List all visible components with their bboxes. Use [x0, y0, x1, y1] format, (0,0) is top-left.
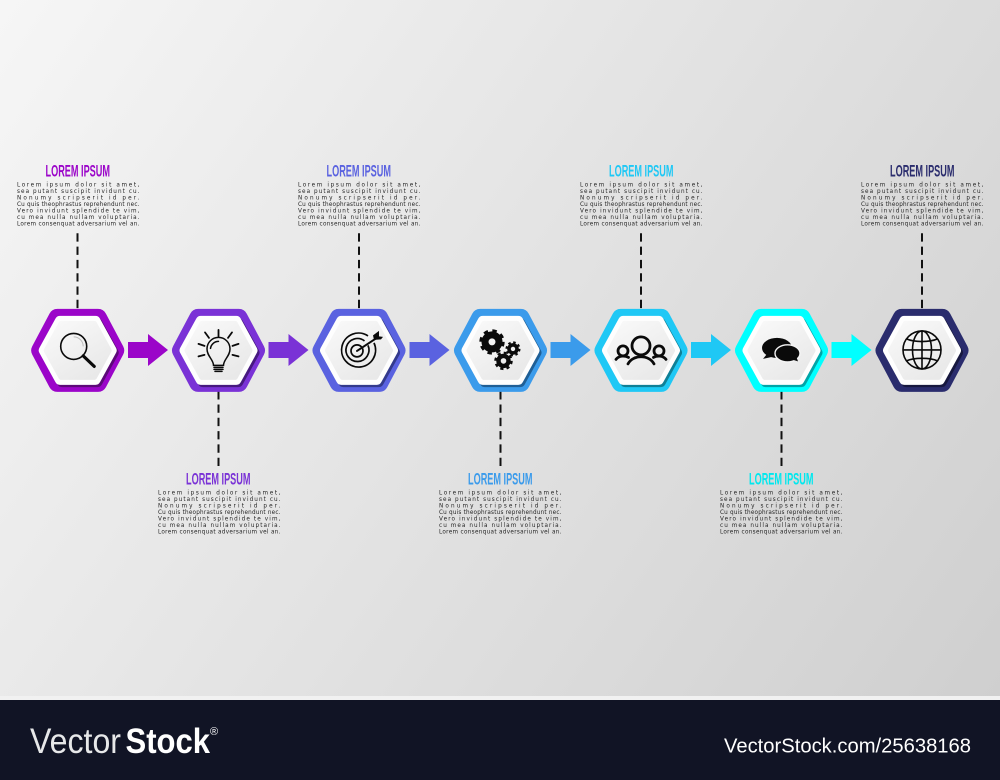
icon: globe	[903, 331, 941, 369]
text block 6: sea putant suscipit invidunt cu.	[720, 497, 843, 503]
text block 4: Vero invidunt splendide te vim,	[439, 517, 562, 523]
text block 4: Lorem ipsum dolor sit amet,	[439, 490, 562, 496]
step 6: chat	[720, 318, 843, 536]
text block 4: Nonumy scripserit id per.	[439, 503, 562, 509]
text block 1: Nonumy scripserit id per.	[17, 195, 140, 201]
text block 7: sea putant suscipit invidunt cu.	[861, 189, 984, 195]
text block 6	[720, 490, 843, 536]
text block 5: Vero invidunt splendide te vim,	[580, 209, 703, 215]
text block 5: Nonumy scripserit id per.	[580, 195, 703, 201]
hexagon 6	[744, 318, 819, 383]
heading 3: LOREM IPSUM	[326, 162, 391, 181]
heading 1: LOREM IPSUM	[46, 162, 110, 181]
text block 7: cu mea nulla nullam voluptaria.	[861, 215, 984, 221]
text block 7: Nonumy scripserit id per.	[861, 195, 984, 201]
text block 2: sea putant suscipit invidunt cu.	[158, 497, 281, 503]
heading 5: LOREM IPSUM	[609, 162, 674, 181]
text block 7: Lorem ipsum dolor sit amet,	[861, 182, 984, 188]
connector 4	[500, 391, 502, 466]
text block 6: Lorem ipsum dolor sit amet,	[720, 490, 843, 496]
step 1: search	[17, 162, 140, 383]
arrow 1	[128, 334, 168, 366]
text block 3: Lorem consenquat adversarium vel an.	[298, 222, 421, 228]
icon: gears	[481, 331, 520, 369]
text block 3: Nonumy scripserit id per.	[298, 195, 421, 201]
step 3: target	[298, 162, 421, 383]
text block 1: sea putant suscipit invidunt cu.	[17, 189, 140, 195]
text block 3: Lorem ipsum dolor sit amet,	[298, 182, 421, 188]
icon: magnifying glass	[61, 333, 94, 366]
text block 2: cu mea nulla nullam voluptaria.	[158, 523, 281, 529]
text block 1: Vero invidunt splendide te vim,	[17, 209, 140, 215]
hexagon 4	[463, 318, 538, 383]
connector 1	[76, 233, 78, 310]
text block 2: Vero invidunt splendide te vim,	[158, 517, 281, 523]
heading 2: LOREM IPSUM	[186, 470, 250, 489]
footer url: VectorStock.com/25638168	[724, 736, 971, 758]
text block 4: Cu quis theophrastus reprehendunt nec.	[439, 510, 562, 516]
footer logo: Stock	[126, 722, 210, 761]
text block 4: sea putant suscipit invidunt cu.	[439, 497, 562, 503]
text block 2: Cu quis theophrastus reprehendunt nec.	[158, 510, 281, 516]
text block 4: cu mea nulla nullam voluptaria.	[439, 523, 562, 529]
arrow 3	[410, 334, 450, 366]
footer logo: ®	[210, 726, 218, 738]
step 5: people	[580, 162, 703, 383]
footer logo: Vector	[30, 722, 121, 761]
text block 5: Cu quis theophrastus reprehendunt nec.	[580, 202, 703, 208]
text block 6: Cu quis theophrastus reprehendunt nec.	[720, 510, 843, 516]
text block 6: Lorem consenquat adversarium vel an.	[720, 530, 843, 536]
connector 7	[921, 233, 923, 310]
step 7: globe	[861, 162, 984, 383]
arrow 6	[832, 334, 872, 366]
text block 3	[298, 182, 421, 228]
text block 1: Lorem consenquat adversarium vel an.	[17, 222, 140, 228]
arrow 4	[550, 334, 590, 366]
text block 6: cu mea nulla nullam voluptaria.	[720, 523, 843, 529]
connector 6	[780, 391, 782, 466]
text block 7: Cu quis theophrastus reprehendunt nec.	[861, 202, 984, 208]
text block 1	[17, 182, 140, 228]
text block 6: Vero invidunt splendide te vim,	[720, 517, 843, 523]
hexagon 3	[322, 318, 396, 383]
connector 3	[358, 233, 360, 310]
connector 5	[640, 233, 642, 310]
text block 1: Lorem ipsum dolor sit amet,	[17, 182, 140, 188]
text block 5: cu mea nulla nullam voluptaria.	[580, 215, 703, 221]
text block 7: Vero invidunt splendide te vim,	[861, 209, 984, 215]
hexagon 2	[181, 318, 256, 383]
icon: people group	[616, 337, 666, 364]
step 2: idea	[158, 318, 281, 536]
text block 5: Lorem consenquat adversarium vel an.	[580, 222, 703, 228]
text block 5: Lorem ipsum dolor sit amet,	[580, 182, 703, 188]
hexagon 1	[40, 318, 115, 383]
icon: target with arrow	[342, 331, 383, 367]
text block 2: Nonumy scripserit id per.	[158, 503, 281, 509]
text block 2: Lorem consenquat adversarium vel an.	[158, 530, 281, 536]
text block 3: Cu quis theophrastus reprehendunt nec.	[298, 202, 421, 208]
text block 1: cu mea nulla nullam voluptaria.	[17, 215, 140, 221]
text block 7	[861, 182, 984, 228]
footer bar	[0, 700, 1000, 780]
heading 6: LOREM IPSUM	[749, 470, 814, 489]
text block 3: cu mea nulla nullam voluptaria.	[298, 215, 421, 221]
text block 5	[580, 182, 703, 228]
step 4: gears	[439, 318, 562, 536]
arrow 5	[691, 334, 731, 366]
text block 2: Lorem ipsum dolor sit amet,	[158, 490, 281, 496]
arrow 2	[268, 334, 308, 366]
heading 4: LOREM IPSUM	[468, 470, 532, 489]
text block 7: Lorem consenquat adversarium vel an.	[861, 222, 984, 228]
text block 3: sea putant suscipit invidunt cu.	[298, 189, 421, 195]
icon: speech bubbles	[762, 338, 800, 362]
text block 1: Cu quis theophrastus reprehendunt nec.	[17, 202, 140, 208]
text block 6: Nonumy scripserit id per.	[720, 503, 843, 509]
text block 4: Lorem consenquat adversarium vel an.	[439, 530, 562, 536]
connector 2	[218, 391, 220, 466]
text block 3: Vero invidunt splendide te vim,	[298, 209, 421, 215]
footer logo	[30, 722, 218, 761]
hexagon 5	[604, 318, 678, 383]
text block 4	[439, 490, 562, 536]
text block 5: sea putant suscipit invidunt cu.	[580, 189, 703, 195]
icon: light bulb	[198, 330, 238, 371]
hexagon 7	[884, 318, 960, 383]
text block 2	[158, 490, 281, 536]
